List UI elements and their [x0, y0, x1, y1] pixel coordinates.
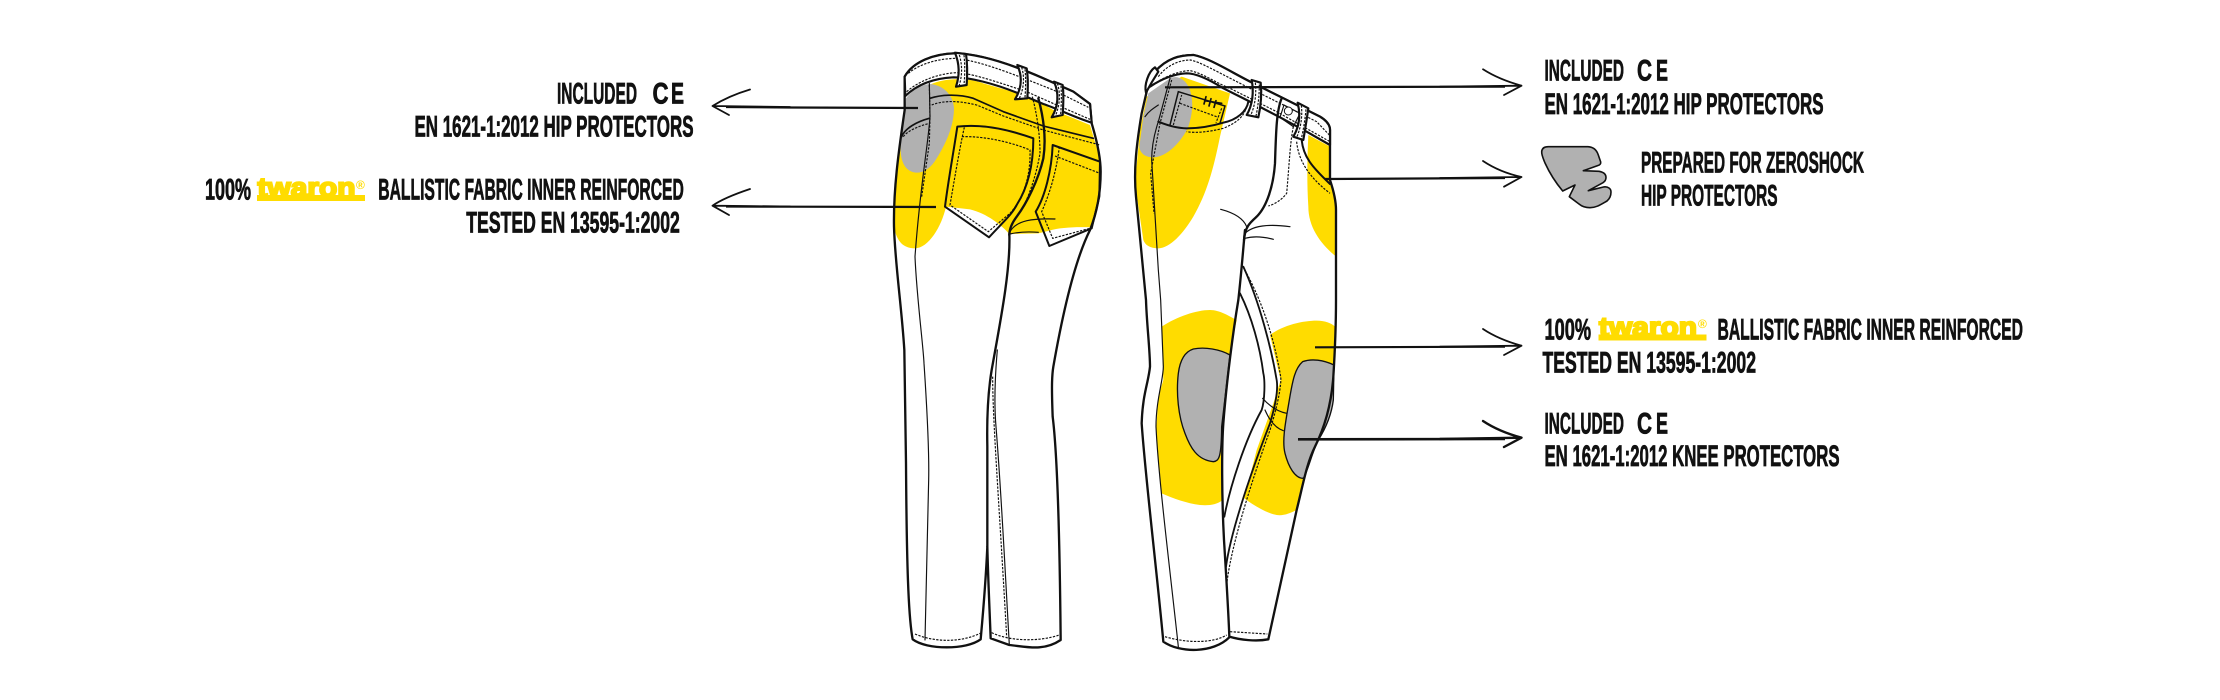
back centre seam [1009, 98, 1045, 235]
callout: right twaron fabric [1542, 312, 2023, 380]
icon: CE mark: E [1656, 407, 1668, 440]
text: 100%: 100% [205, 173, 251, 206]
back hip protector: grey [901, 84, 954, 173]
icon: CE mark [1637, 55, 1668, 88]
text: hip protectors: HIP PROTECTORS [1641, 180, 1778, 213]
illustration: jeans front view [1135, 55, 1336, 650]
logo: twaron: twaron [258, 172, 356, 202]
icon: CE mark [1637, 407, 1668, 440]
text: hip protector standard: EN 1621-1:2012 HIP PROTECTORS [1544, 88, 1824, 121]
front hem stitching [1165, 632, 1267, 641]
arrow: left hip protectors [712, 90, 918, 115]
logo: twaron: twaron [1599, 312, 1697, 342]
text: included CE: INCLUDED [557, 77, 637, 110]
back jeans outline [894, 53, 1101, 647]
arrow: right hip protectors [1165, 69, 1522, 95]
icon: zeroshock protector [1542, 147, 1611, 208]
logo: twaron: ® [356, 178, 365, 192]
front left pocket [1158, 102, 1248, 128]
illustration: jeans back view [894, 53, 1101, 647]
back right pocket [1036, 145, 1100, 246]
coin pocket [1170, 92, 1225, 125]
front right pocket [1302, 140, 1330, 184]
icon: CE mark [652, 77, 684, 110]
text: included CE: INCLUDED [1544, 55, 1624, 88]
front hip protector: grey [1139, 77, 1192, 157]
front waistband [1150, 55, 1330, 145]
text: tested standard: TESTED EN 13595-1:2002 [466, 207, 680, 240]
text: tested standard: TESTED EN 13595-1:2002 [1542, 347, 1756, 380]
back side seam [915, 83, 930, 640]
icon: CE mark: C [1637, 55, 1652, 88]
front waistband tab [1146, 67, 1158, 93]
knee creases [1263, 398, 1287, 431]
left knee reinforced area: yellow [1156, 310, 1237, 505]
back waistband [905, 53, 1092, 123]
front belt loops [1247, 80, 1308, 140]
icon: CE mark: E [1656, 55, 1668, 88]
callout: knee protectors [1544, 407, 1840, 473]
back hem stitching [915, 633, 1059, 640]
front side seam [1152, 78, 1178, 647]
callout: left twaron fabric [205, 172, 684, 240]
back creases [1010, 219, 1055, 234]
back left pocket [945, 126, 1033, 237]
back reinforced area: yellow [894, 79, 1101, 248]
icon: CE mark: C [1637, 407, 1652, 440]
text: prepared for zeroshock: PREPARED FOR ZEROSHOCK [1641, 147, 1864, 180]
front creases [1221, 209, 1290, 239]
callout: right hip protectors [1544, 55, 1824, 121]
left knee protector: grey [1177, 348, 1230, 462]
back inner leg lines [987, 234, 1009, 547]
arrow: knee protectors [1298, 421, 1522, 447]
arrow: zeroshock [1325, 161, 1522, 187]
logo: twaron: ® [1698, 317, 1707, 331]
side hip reinforced area: yellow [1307, 135, 1335, 256]
front inner leg lines [1224, 293, 1264, 517]
text: included CE: INCLUDED [1544, 407, 1624, 440]
arrow: right twaron fabric [1315, 329, 1522, 355]
right knee reinforced area: yellow [1244, 321, 1335, 515]
back yoke seams [930, 95, 1093, 138]
text: ballistic fabric: BALLISTIC FABRIC INNER REINFORCED [378, 173, 684, 206]
icon: CE mark: E [671, 77, 684, 110]
front fly [1244, 98, 1282, 240]
right knee protector: grey [1284, 360, 1334, 478]
front hip yoke line [1145, 105, 1158, 117]
text: 100%: 100% [1544, 313, 1591, 346]
text: knee protector standard: EN 1621-1:2012 KNEE PROTECTORS [1544, 440, 1840, 473]
arrow: left twaron fabric [712, 189, 936, 215]
icon: CE mark: C [652, 77, 668, 110]
front jeans outline [1155, 55, 1336, 640]
callout: zeroshock hip protectors [1542, 147, 1864, 213]
text: hip protector standard: EN 1621-1:2012 HIP PROTECTORS [414, 110, 694, 143]
front hip reinforced area: yellow [1135, 77, 1230, 248]
callout: left hip protectors [414, 77, 694, 143]
back belt loops [955, 53, 1063, 117]
